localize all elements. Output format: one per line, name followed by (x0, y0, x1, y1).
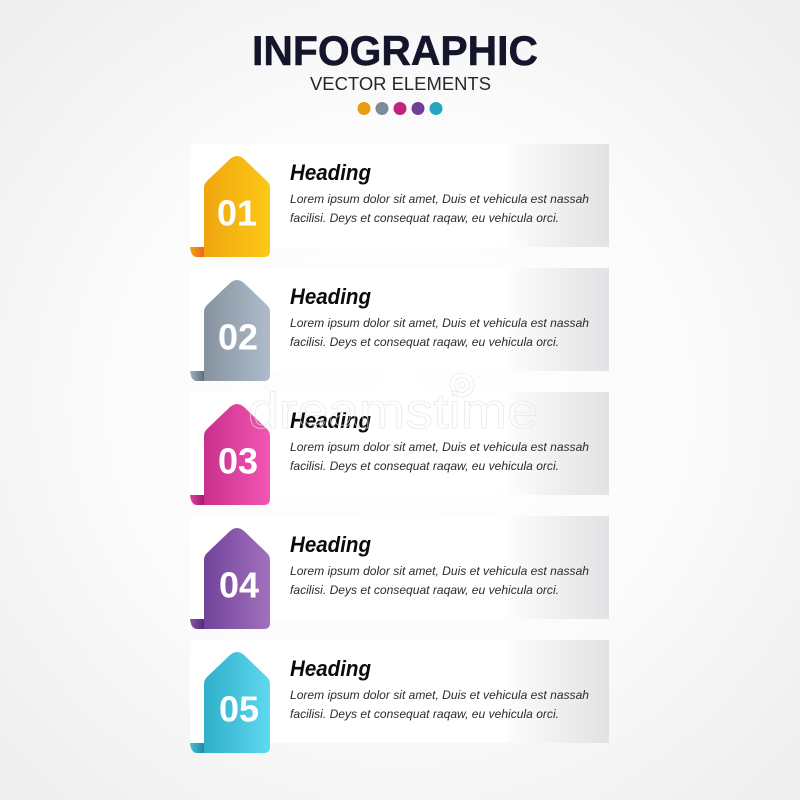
icon: cyan tag with fold (190, 652, 270, 753)
body text: Lorem ipsum dolor sit amet, Duis et vehicula est nassah (290, 688, 589, 702)
panel: step 05 (190, 640, 609, 753)
panel background (190, 516, 609, 619)
icon: grey tag with fold (190, 280, 270, 381)
icon: magenta tag with fold (190, 404, 270, 505)
panel background (190, 640, 609, 743)
icon: purple tag with fold (190, 528, 270, 629)
body text: Lorem ipsum dolor sit amet, Duis et vehicula est nassah (290, 192, 589, 206)
heading: Heading (290, 284, 372, 309)
icon: orange tag with fold (190, 156, 270, 257)
body text (290, 316, 589, 349)
panel background (190, 268, 609, 371)
number: 04 (219, 564, 259, 606)
number: 03 (218, 440, 258, 482)
panel background (190, 144, 609, 247)
title block (252, 27, 538, 115)
body text: Lorem ipsum dolor sit amet, Duis et vehicula est nassah (290, 316, 589, 330)
panel: step 01 (190, 144, 609, 257)
colour dots (358, 102, 442, 115)
panel: step 03 (190, 392, 609, 505)
body text: facilisi. Deys et consequat raqaw, eu vehicula orci. (290, 211, 559, 225)
body text (290, 688, 589, 721)
body text: Lorem ipsum dolor sit amet, Duis et vehicula est nassah (290, 440, 589, 454)
title: INFOGRAPHIC (252, 27, 538, 74)
heading: Heading (290, 532, 372, 557)
number: 02 (218, 316, 258, 358)
body text: facilisi. Deys et consequat raqaw, eu vehicula orci. (290, 335, 559, 349)
body text: facilisi. Deys et consequat raqaw, eu vehicula orci. (290, 583, 559, 597)
number: 05 (219, 688, 259, 730)
heading: Heading (290, 656, 372, 681)
body text (290, 564, 589, 597)
body text: facilisi. Deys et consequat raqaw, eu vehicula orci. (290, 459, 559, 473)
panel: step 02 (190, 268, 609, 381)
body text (290, 192, 589, 225)
panel background (190, 392, 609, 495)
body text: Lorem ipsum dolor sit amet, Duis et vehicula est nassah (290, 564, 589, 578)
heading: Heading (290, 160, 372, 185)
subtitle: VECTOR ELEMENTS (310, 73, 491, 94)
number: 01 (217, 192, 257, 234)
heading: Heading (290, 408, 372, 433)
body text: facilisi. Deys et consequat raqaw, eu vehicula orci. (290, 707, 559, 721)
watermark: dreamstime (248, 383, 538, 439)
body text (290, 440, 589, 473)
panel: step 04 (190, 516, 609, 629)
